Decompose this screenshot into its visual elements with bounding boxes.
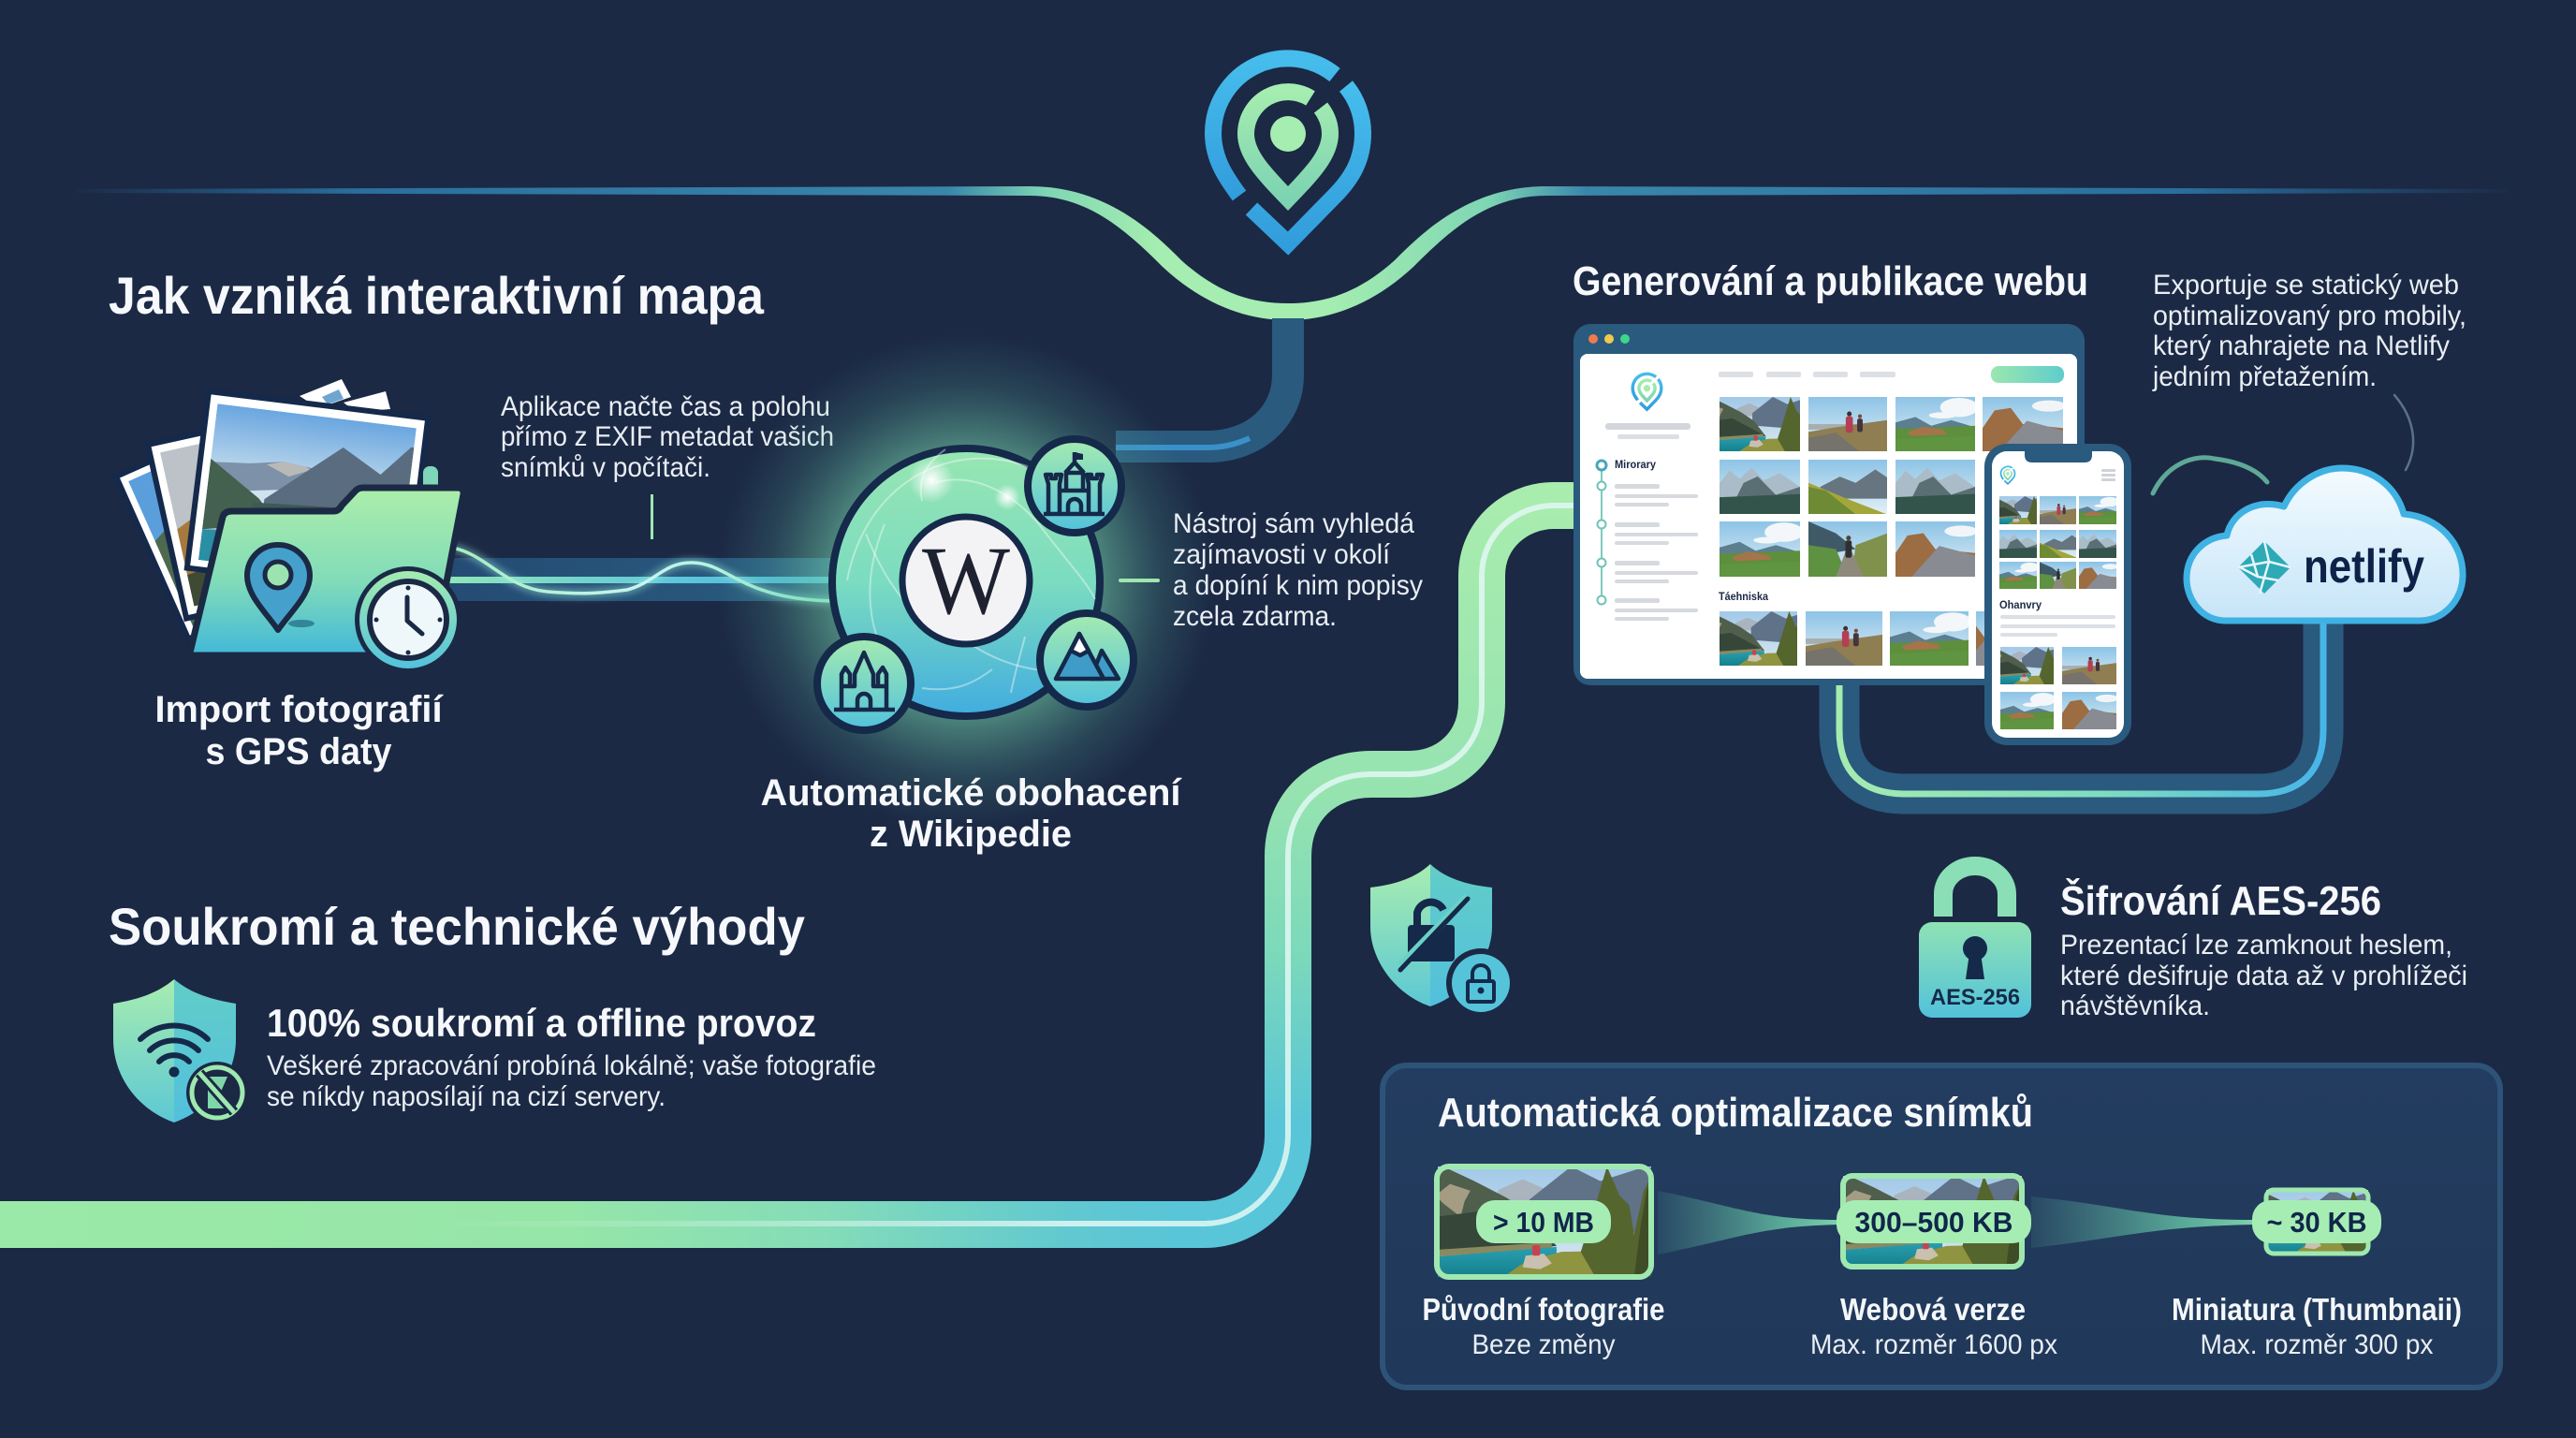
text: AES encryption: které dešifruje data až v prohlížeči (2060, 961, 2467, 991)
sidebar: Mirorary (1615, 458, 1656, 471)
Wikipedia W (902, 517, 1030, 644)
captions: Max. rozměr 300 px (2200, 1329, 2434, 1360)
photo grid: Táehniska (1719, 590, 1768, 603)
captions: Miniatura (Thumbnaii) (2172, 1292, 2462, 1327)
captions: Max. rozměr 1600 px (1810, 1329, 2057, 1360)
icon: Netlify logo (2238, 541, 2291, 594)
step: thumbnail: ~ 30 KB (2267, 1206, 2366, 1239)
step: web version: 300–500 KB (1855, 1206, 2012, 1239)
step: original (1436, 1167, 1653, 1277)
text: EXIF note: snímků v počítači. (501, 452, 710, 483)
label: Wikipedia enrichment: z Wikipedie (870, 814, 1072, 855)
text: EXIF note: přímo z EXIF metadat vašich (501, 421, 834, 452)
glow (718, 334, 1214, 830)
text: AES encryption: Prezentací lze zamknout heslem, (2060, 930, 2452, 961)
label: photo import (155, 689, 444, 772)
text: export note: optimalizovaný pro mobily, (2153, 301, 2466, 331)
icon: cathedral (817, 637, 911, 730)
step: thumbnail (2252, 1190, 2381, 1254)
captions: Původní fotografie (1423, 1292, 1664, 1327)
sidebar (1597, 374, 1698, 621)
captions: Webová verze (1840, 1292, 2026, 1327)
text: Wikipedia note: Nástroj sám vyhledá (1173, 508, 1414, 539)
label: photo import: Import fotografií (155, 689, 444, 730)
text: Wikipedia note: zcela zdarma. (1173, 601, 1337, 632)
label: Wikipedia enrichment: Automatické obohacení (760, 772, 1182, 814)
Netlify cloud (2187, 468, 2463, 621)
text: AES encryption: návštěvníka. (2060, 990, 2210, 1021)
text: export note (2152, 270, 2466, 392)
connector: folder to Wikipedia signal wave (447, 548, 834, 601)
connector: top line to Wikipedia (1116, 318, 1288, 448)
sphere (832, 448, 1100, 716)
icon: clock (355, 566, 461, 673)
step: original: > 10 MB (1493, 1206, 1594, 1239)
icon: mountains (1040, 613, 1134, 707)
heading: web generation: Generování a publikace webu (1573, 258, 2088, 304)
back photos (116, 379, 390, 639)
main path: gradient road (0, 506, 1591, 1225)
text: EXIF note (501, 391, 834, 483)
heading: how the map is made: Jak vzniká interaktivní mapa (109, 266, 765, 325)
text: Wikipedia note: a dopíní k nim popisy (1173, 570, 1423, 601)
text: export note: Exportuje se statický web (2153, 270, 2459, 301)
pointer: EXIF note to wave (651, 494, 653, 539)
top flowing line (75, 186, 2509, 320)
label: photo import: s GPS daty (206, 731, 392, 772)
text: privacy: 100% soukromí a offline provoz (267, 1001, 816, 1045)
heading: privacy and technical advantages: Soukromí a technické výhody (109, 897, 805, 956)
funnels (1658, 1191, 2254, 1255)
Netlify cloud: netlify (2304, 540, 2424, 593)
main photo (187, 391, 428, 594)
pointer: Wikipedia to note (1119, 579, 1160, 582)
icon: photos in folder (116, 379, 463, 673)
label: Wikipedia enrichment (760, 772, 1182, 855)
top nav (1719, 366, 2064, 383)
text: EXIF note: Aplikace načte čas a polohu (501, 391, 830, 422)
icon: map pin on folder (247, 545, 315, 630)
phone mockup: Ohanvry (1999, 598, 2042, 611)
icon: castle (1028, 439, 1121, 533)
text: privacy: Veškeré zpracování probíná lokálně; vaše fotografie (267, 1050, 876, 1081)
icon: Wikipedia sphere (718, 334, 1214, 830)
text: AES encryption: Šifrování AES-256 (2060, 876, 2381, 924)
icon: AES padlock (1919, 866, 2031, 1018)
arrow arcs: upload to cloud (2153, 395, 2413, 493)
phone mockup (1984, 444, 2131, 745)
text: AES encryption (2060, 876, 2467, 1021)
photo grid (1705, 396, 2066, 666)
panel: automatic image optimization (1383, 1065, 2500, 1387)
captions: Beze změny (1471, 1329, 1616, 1360)
text: privacy (267, 1001, 876, 1112)
window dots (1588, 334, 1630, 344)
text: export note: jedním přetažením. (2152, 361, 2377, 392)
folder (190, 466, 463, 655)
Wikipedia W: W (922, 527, 1010, 635)
connector loop: browser to cloud (1839, 609, 2323, 794)
text: privacy: se níkdy naposílají na cizí servery. (267, 1081, 666, 1112)
logo: map pin (1213, 58, 1363, 243)
captions (1423, 1292, 2462, 1360)
step: web version (1837, 1176, 2031, 1267)
icon: shield wifi (113, 979, 248, 1123)
icon: AES padlock: AES-256 (1930, 985, 2020, 1010)
text: export note: který nahrajete na Netlify (2153, 330, 2450, 361)
text: Wikipedia note (1173, 508, 1423, 632)
browser window mockup (1573, 324, 2085, 685)
icon: shield with lock (1370, 864, 1515, 1018)
panel heading: Automatická optimalizace snímků (1438, 1090, 2033, 1136)
text: Wikipedia note: zajímavosti v okolí (1173, 539, 1391, 570)
